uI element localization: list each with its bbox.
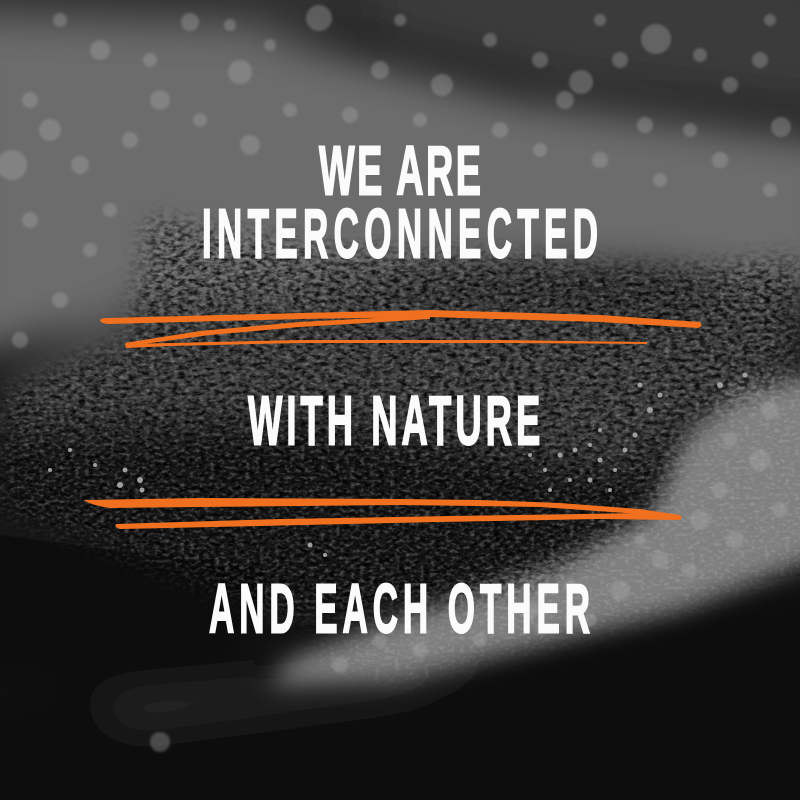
- rock texture: [0, 208, 800, 628]
- heading line: WE ARE: WE ARE: [319, 131, 481, 209]
- water droplets: [48, 372, 748, 557]
- upper orange scribble: [100, 310, 702, 348]
- foam texture: [308, 376, 800, 683]
- lower orange scribble: [84, 498, 682, 529]
- heading line: WITH NATURE: WITH NATURE: [248, 382, 540, 460]
- light foam band, lower right: [270, 370, 800, 685]
- heading line: AND EACH OTHER: AND EACH OTHER: [209, 569, 590, 648]
- heading line: INTERCONNECTED: INTERCONNECTED: [202, 194, 598, 273]
